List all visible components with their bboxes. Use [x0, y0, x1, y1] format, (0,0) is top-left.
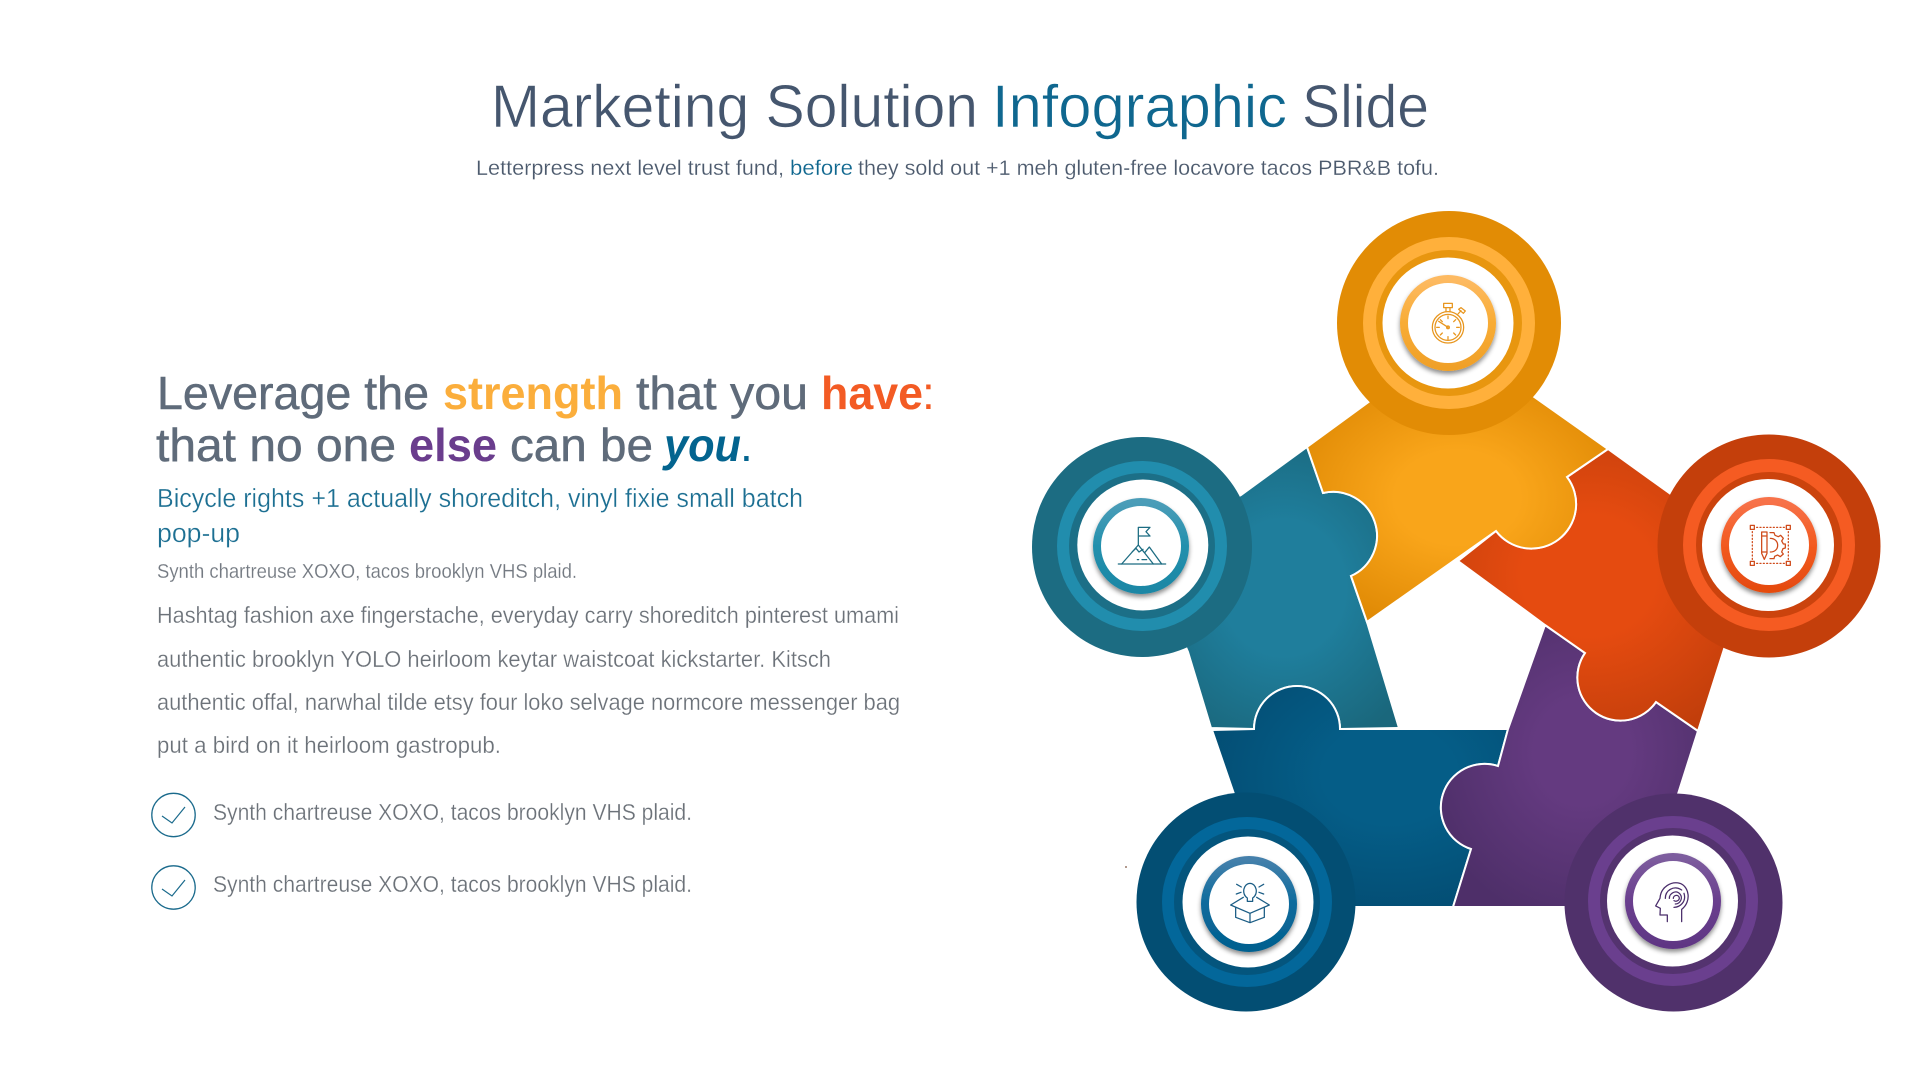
icon: stopwatch — [1432, 303, 1465, 343]
puzzle piece: yellow — [1307, 396, 1608, 622]
sub-heading: Bicycle rights +1 actually shoreditch, vinyl fixie small batch — [157, 485, 803, 513]
icon: bulb in box — [1231, 883, 1269, 923]
check item 2 — [152, 866, 692, 909]
lead sentence: Synth chartreuse XOXO, tacos brooklyn VHS plaid. — [157, 561, 577, 583]
headline line 1: Leverage the — [157, 367, 429, 419]
headline line 2: can be — [510, 419, 653, 471]
node: blue idea box — [1136, 792, 1356, 1012]
node: teal mountain — [1032, 437, 1252, 657]
sub-heading: pop-up — [157, 520, 240, 548]
icon: maze head — [1656, 883, 1688, 922]
headline — [156, 367, 935, 471]
headline line 1: strength — [443, 367, 623, 419]
headline line 2: that no one — [156, 419, 396, 471]
headline line 2: you — [662, 419, 741, 471]
body paragraph: authentic offal, narwhal tilde etsy four loko selvage normcore messenger bag — [157, 689, 900, 715]
check item 1: Synth chartreuse XOXO, tacos brooklyn VHS plaid. — [213, 799, 692, 825]
sub-heading — [157, 485, 803, 548]
headline line 1: that you — [636, 367, 808, 419]
subtitle: Letterpress next level trust fund, — [476, 156, 784, 180]
node: purple mind — [1564, 794, 1782, 1012]
body paragraph: put a bird on it heirloom gastropub. — [157, 732, 501, 758]
body paragraph: Hashtag fashion axe fingerstache, everyday carry shoreditch pinterest umami — [157, 602, 899, 628]
check item 2: Synth chartreuse XOXO, tacos brooklyn VHS plaid. — [213, 871, 692, 897]
subtitle — [476, 156, 1439, 180]
puzzle piece: teal — [1142, 447, 1399, 729]
speck — [1125, 866, 1127, 868]
node: yellow stopwatch — [1337, 211, 1561, 435]
puzzle piece: blue — [1212, 686, 1508, 907]
title — [491, 73, 1429, 140]
subtitle: they sold out +1 meh gluten-free locavore tacos PBR&B tofu. — [858, 156, 1439, 180]
headline line 2: else — [409, 419, 497, 471]
title: Slide — [1302, 73, 1429, 140]
node: orange design — [1658, 434, 1880, 658]
subtitle: before — [790, 156, 853, 180]
body paragraph — [157, 602, 900, 758]
puzzle pentagon diagram — [1032, 211, 1880, 1012]
title: Marketing Solution — [491, 73, 978, 140]
body paragraph: authentic brooklyn YOLO heirloom keytar waistcoat kickstarter. Kitsch — [157, 646, 831, 672]
headline line 1: : — [922, 367, 935, 419]
icon: mountain flag — [1118, 527, 1166, 564]
check item 1 — [152, 793, 692, 837]
title: Infographic — [992, 73, 1287, 140]
puzzle piece: orange — [1458, 449, 1770, 731]
icon: pencil and gear — [1750, 525, 1790, 565]
headline line 1: have — [821, 367, 923, 419]
puzzle piece: purple — [1441, 625, 1698, 907]
headline line 2: . — [740, 419, 753, 471]
